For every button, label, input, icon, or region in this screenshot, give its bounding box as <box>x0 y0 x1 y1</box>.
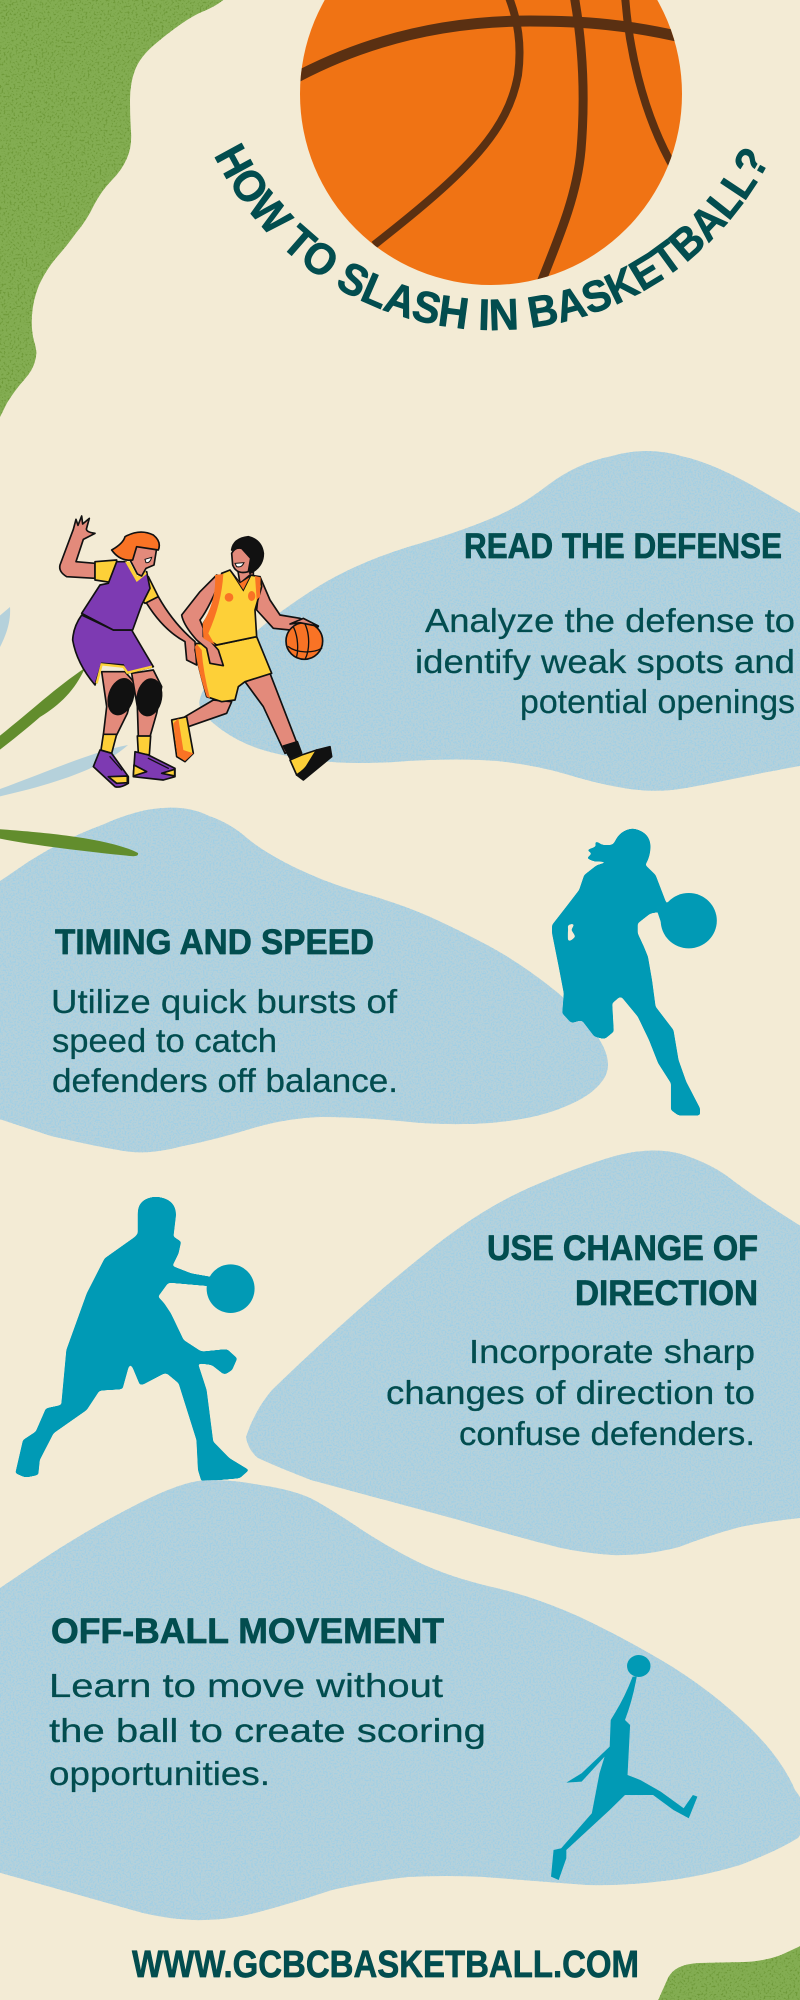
body: read the defense: potential openings <box>520 683 795 720</box>
body: off-ball movement: opportunities. <box>49 1755 270 1792</box>
panel: use change of direction <box>15 1150 800 1555</box>
heading: use change of direction: DIRECTION <box>575 1274 758 1313</box>
heading: use change of direction <box>487 1229 758 1313</box>
leaf: blue lower <box>0 745 128 797</box>
heading: use change of direction: USE CHANGE OF <box>487 1229 758 1268</box>
icon: silhouette of man dribbling <box>15 1197 255 1482</box>
panel: timing and speed <box>0 808 717 1152</box>
body: read the defense: Analyze the defense to <box>425 602 795 639</box>
green corner shape: top left <box>0 0 230 417</box>
body: read the defense: identify weak spots and <box>415 643 795 680</box>
body: timing and speed: Utilize quick bursts of <box>51 983 398 1020</box>
body: use change of direction: confuse defenders. <box>459 1415 755 1452</box>
illustration: two basketball players <box>60 516 332 787</box>
heading: off-ball movement: OFF-BALL MOVEMENT <box>51 1612 444 1651</box>
body: timing and speed: speed to catch <box>52 1022 277 1059</box>
purple player <box>60 516 197 787</box>
panel: off-ball movement <box>0 1480 800 1920</box>
leaf: small blue top <box>0 607 10 647</box>
yellow player with ball <box>172 537 332 780</box>
body: use change of direction: Incorporate sharp <box>469 1333 755 1370</box>
title: curved heading: HOW TO SLASH IN BASKETBALL? <box>214 142 766 330</box>
blob: use change of direction <box>246 1150 800 1555</box>
leaf: green diagonal <box>0 668 85 752</box>
heading: timing and speed: TIMING AND SPEED <box>55 923 374 962</box>
website footer: WWW.GCBCBASKETBALL.COM <box>132 1944 639 1986</box>
body: off-ball movement <box>49 1667 486 1792</box>
body: use change of direction <box>386 1333 755 1452</box>
basketball <box>295 0 685 290</box>
leaf: green horizontal <box>0 829 138 856</box>
blob: off-ball movement <box>0 1480 800 1920</box>
body: timing and speed <box>51 983 398 1099</box>
icon: silhouette of woman dribbling <box>552 828 717 1116</box>
blob: read the defense <box>199 451 800 791</box>
body: timing and speed: defenders off balance. <box>52 1062 398 1099</box>
body: read the defense <box>415 602 795 720</box>
body: off-ball movement: Learn to move without <box>49 1667 443 1704</box>
body: use change of direction: changes of direction to <box>386 1374 755 1411</box>
green corner shape: bottom right <box>656 1944 800 2000</box>
panel: read the defense <box>199 451 800 791</box>
body: off-ball movement: the ball to create scoring <box>49 1712 486 1749</box>
blob: timing and speed <box>0 808 608 1152</box>
icon: silhouette of jumping player <box>551 1655 697 1880</box>
